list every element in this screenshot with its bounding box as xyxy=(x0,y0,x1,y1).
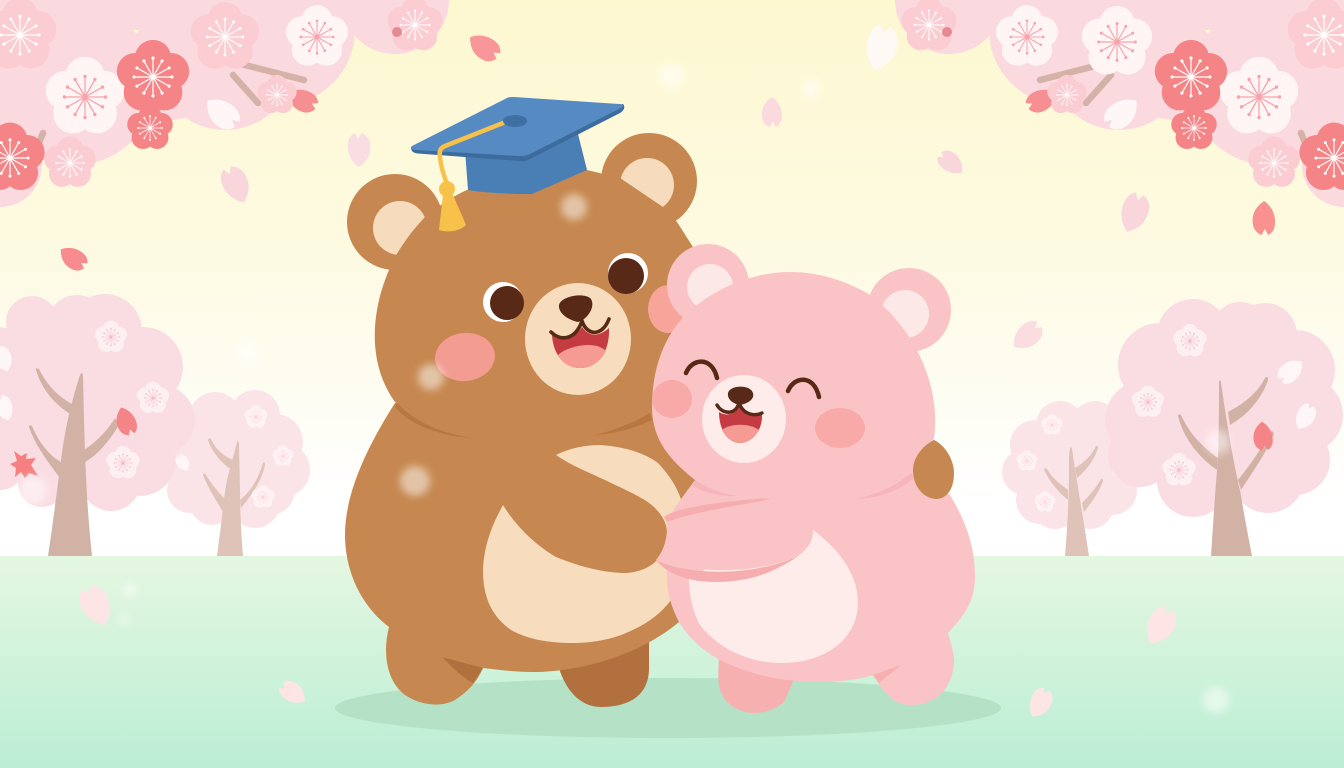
pink bear muzzle xyxy=(702,375,786,463)
brown bear eyes xyxy=(483,253,648,322)
sky background xyxy=(0,0,1344,557)
brown bear back foot xyxy=(558,640,649,707)
brown bear nose xyxy=(559,295,592,322)
brown bear cheek left xyxy=(433,330,497,384)
pink bear neck folds xyxy=(693,473,914,499)
pink bear cheeks xyxy=(652,380,865,448)
pink bear head xyxy=(652,272,935,500)
pink bear body xyxy=(656,470,975,705)
tree: small right xyxy=(1002,401,1137,556)
brown bear xyxy=(345,133,705,707)
pink bear closed eyes xyxy=(686,362,819,397)
pink bear xyxy=(652,244,975,713)
cap board edge xyxy=(411,104,624,161)
cap board xyxy=(411,97,623,156)
brown bear arm xyxy=(500,440,667,573)
red maple-like leaf xyxy=(10,451,38,478)
brown bear foot crease xyxy=(442,657,483,683)
grass ground xyxy=(0,556,1344,768)
pink bear ears xyxy=(667,244,951,352)
tree: small left xyxy=(163,390,310,556)
cap tassel xyxy=(439,115,527,231)
pink bear foot crease xyxy=(873,665,901,683)
pink bear belly xyxy=(689,530,858,663)
brown bear cheek right xyxy=(648,285,688,333)
brown bear mouth xyxy=(551,319,609,368)
tree: large right xyxy=(1105,299,1343,556)
brown bear ears xyxy=(347,133,697,270)
tree: large left xyxy=(0,294,195,556)
bokeh light spots xyxy=(19,63,1230,713)
ground shadow under bears xyxy=(335,678,1001,738)
pink bear front foot xyxy=(718,655,796,713)
pink bear nose xyxy=(728,387,753,405)
blossom branch: top left xyxy=(0,0,449,207)
pink bear arm xyxy=(656,497,813,582)
pink bear mouth xyxy=(717,403,762,443)
cap base xyxy=(465,130,587,194)
brown bear belly xyxy=(483,445,683,643)
brown bear muzzle xyxy=(525,283,631,395)
graduation cap xyxy=(411,97,624,231)
brown bear neck folds xyxy=(395,403,652,438)
brown bear body xyxy=(345,403,700,705)
blossom branch: top right xyxy=(895,0,1344,207)
brown bear head xyxy=(375,170,705,439)
brown bear hand on pink back xyxy=(913,440,954,499)
